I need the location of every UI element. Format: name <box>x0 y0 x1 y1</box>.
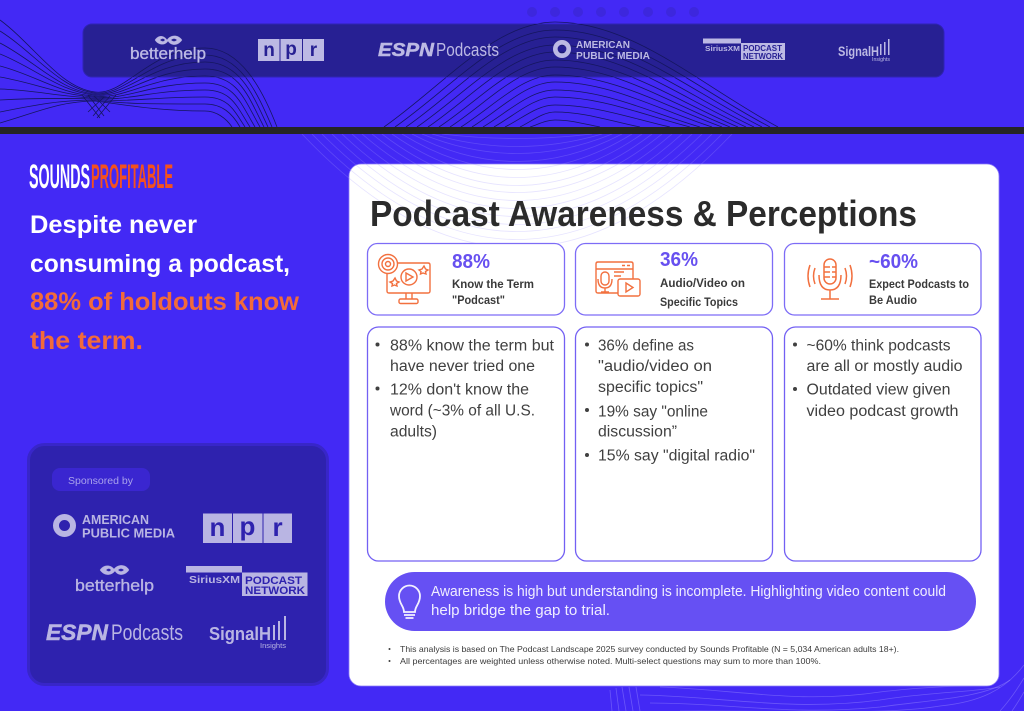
logo: npr: p <box>285 39 297 60</box>
logo: SignalHill Insights: Insights <box>260 643 287 650</box>
footnotes: This analysis is based on The Podcast Landscape 2025 survey conducted by Sounds Profitable (N = 5,034 American adults 18+). <box>400 644 899 654</box>
logo: SiriusXM Podcast Network: SiriusXM <box>189 575 240 586</box>
stat text <box>660 249 745 309</box>
logo: SiriusXM Podcast Network: NETWORK <box>245 585 305 597</box>
stat text <box>452 251 534 307</box>
footnotes <box>388 644 899 666</box>
logo: SiriusXM Podcast Network <box>186 566 308 597</box>
logo: ESPN Podcasts: Podcasts <box>436 40 499 60</box>
logo: SignalHill Insights <box>209 616 287 650</box>
logo: SiriusXM Podcast Network: PODCAST <box>245 575 302 587</box>
logo: American Public Media <box>555 39 650 62</box>
text panel: expect audio: ~60% think podcasts <box>806 338 951 354</box>
text panel: expect audio: video podcast growth <box>806 403 958 420</box>
text panel: expect audio: are all or mostly audio <box>806 358 962 375</box>
headline: Despite never <box>30 211 197 239</box>
logo: SiriusXM Podcast Network: PODCAST <box>743 44 782 53</box>
text panel: know the term: 12% don't know the <box>390 382 529 398</box>
logo: npr: n <box>210 512 225 542</box>
logo: ESPN Podcasts: ESPN <box>378 40 435 60</box>
stat text: Specific Topics <box>660 297 738 309</box>
icon: browser with microphone and video <box>596 262 640 296</box>
stat card: ~60% <box>784 244 981 315</box>
logo: ESPN Podcasts: ESPN <box>46 620 109 645</box>
headline: 88% of holdouts know <box>30 288 300 316</box>
text panel: know the term <box>368 327 564 561</box>
text panel: know the term: adults) <box>390 424 437 440</box>
text panel: audio video <box>576 327 772 561</box>
stat text: Audio/Video on <box>660 278 745 290</box>
logo: npr <box>258 39 324 61</box>
text: PROFITABLE <box>91 158 173 196</box>
logo: ESPN Podcasts: Podcasts <box>111 620 183 645</box>
logo: SiriusXM Podcast Network <box>703 38 785 61</box>
logo: Sounds Profitable: SOUNDS <box>29 158 90 196</box>
logo: npr: n <box>263 40 275 61</box>
footnotes: All percentages are weighted unless otherwise noted. Multi-select questions may sum to more than 100%. <box>400 656 821 666</box>
logo: betterhelp <box>130 36 206 63</box>
icon: microphone with sound waves <box>808 259 852 299</box>
text panel: audio video: discussion” <box>598 424 677 440</box>
text panel: audio video: 15% say "digital radio" <box>598 448 755 464</box>
headline: the term. <box>30 327 143 355</box>
text panel: audio video: specific topics" <box>598 379 703 396</box>
stat card: 88% <box>368 244 564 315</box>
stat text: ~60% <box>869 251 918 273</box>
stat text: 88% <box>452 251 490 273</box>
callout <box>385 572 976 631</box>
text panel: audio video: 19% say "online <box>598 404 708 420</box>
icon: monitor with target and play button <box>378 254 430 304</box>
logo: npr: r <box>272 512 283 542</box>
panel: top sponsor logo bar <box>82 24 944 78</box>
stat text: Expect Podcasts to <box>869 279 969 291</box>
logo: SignalHill Insights <box>838 39 891 63</box>
logo: SignalHill Insights: SignalH <box>209 624 271 644</box>
stat text: 36% <box>660 249 698 271</box>
icon: light bulb <box>399 586 420 618</box>
logo: American Public Media: AMERICAN <box>82 513 149 527</box>
callout: help bridge the gap to trial. <box>431 603 610 619</box>
callout: Awareness is high but understanding is incomplete. Highlighting video content could <box>431 584 946 600</box>
text panel: know the term: have never tried one <box>390 358 535 375</box>
logo: SiriusXM Podcast Network: SiriusXM <box>705 44 740 53</box>
title: Podcast Awareness & Perceptions <box>370 193 917 234</box>
label: sponsored by <box>52 468 150 491</box>
stat text: "Podcast" <box>452 295 505 307</box>
logo: betterhelp: betterhelp <box>75 576 154 595</box>
logo: betterhelp: betterhelp <box>130 45 206 63</box>
logo: SignalHill Insights: SignalH <box>838 43 879 59</box>
text panel: audio video: "audio/video on <box>598 358 712 375</box>
text panel: expect audio: Outdated view given <box>806 382 950 398</box>
logo: American Public Media: PUBLIC MEDIA <box>576 50 650 62</box>
headline <box>30 211 300 355</box>
stat text: Know the Term <box>452 279 534 291</box>
stat text: Be Audio <box>869 295 917 307</box>
panel: main white card <box>302 134 999 686</box>
logo: npr: p <box>240 511 255 541</box>
logo: SignalHill Insights: Insights <box>872 57 891 63</box>
logo: npr <box>203 511 292 543</box>
logo: American Public Media: PUBLIC MEDIA <box>82 526 175 540</box>
panel: sponsored by <box>28 444 328 684</box>
logo: betterhelp <box>75 565 154 595</box>
logo: ESPN Podcasts <box>378 40 499 60</box>
logo: American Public Media <box>56 513 175 540</box>
logo: npr: r <box>310 40 318 61</box>
stat card: 36% <box>576 244 772 315</box>
headline: consuming a podcast, <box>30 250 290 278</box>
logo: American Public Media: AMERICAN <box>576 39 630 51</box>
text panel: audio video: 36% define as <box>598 338 694 354</box>
label: sponsored by: Sponsored by <box>68 476 133 487</box>
stat text <box>869 251 969 307</box>
logo: ESPN Podcasts <box>46 620 183 645</box>
text panel: expect audio <box>784 327 981 561</box>
logo: SiriusXM Podcast Network: NETWORK <box>743 52 783 61</box>
text panel: know the term: 88% know the term but <box>390 338 555 354</box>
text panel: know the term: word (~3% of all U.S. <box>389 402 535 420</box>
